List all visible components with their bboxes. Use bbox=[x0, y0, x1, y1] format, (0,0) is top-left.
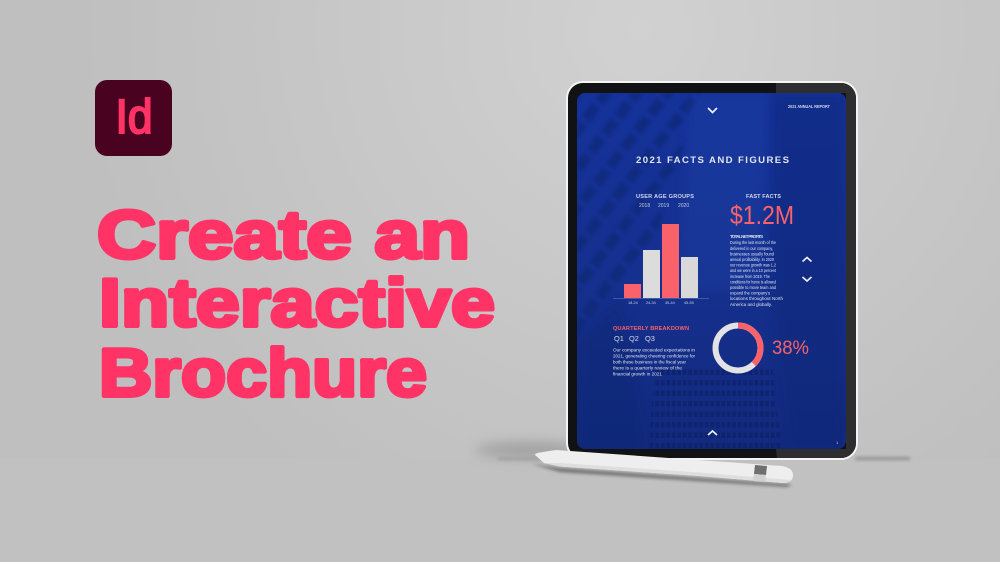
quarterly body: both these business in the fiscal year bbox=[613, 360, 686, 364]
fast facts body: businesses usually found bbox=[730, 251, 774, 256]
quarter tabs: Q1 bbox=[614, 334, 624, 343]
title bbox=[97, 197, 495, 411]
pencil body bbox=[535, 450, 793, 483]
fast facts body: conditions for home is allowed bbox=[730, 279, 776, 284]
building photo texture: facade bbox=[577, 93, 700, 340]
title line: Brochure: Brochure bbox=[99, 335, 427, 411]
age axis labels bbox=[628, 301, 694, 305]
fast facts body: locations throughout North bbox=[730, 296, 783, 301]
donut chart bbox=[716, 326, 760, 370]
quarterly body: financial growth in 2021 bbox=[613, 372, 662, 376]
year tabs: 2018 bbox=[639, 203, 650, 209]
title line: Interactive: Interactive bbox=[99, 265, 495, 341]
fast facts body: America and globally. bbox=[730, 302, 772, 307]
building photo texture: left tower bbox=[582, 309, 632, 404]
fast facts body: and we were in a 10 percent bbox=[730, 268, 777, 273]
quarter tabs: Q2 bbox=[629, 334, 639, 343]
age axis labels: 18-24 bbox=[628, 301, 638, 305]
tablet bezel bbox=[568, 83, 856, 458]
screen heading: 2021 FACTS AND FIGURES bbox=[636, 155, 790, 166]
quarterly body: there is a quarterly review of the bbox=[613, 366, 682, 370]
fast facts body: During the last month of the bbox=[730, 240, 776, 245]
quarter tabs: Q3 bbox=[645, 334, 655, 343]
year tabs: 2020 bbox=[678, 203, 689, 209]
fast facts body: increase from 2019. The bbox=[730, 274, 770, 279]
year tabs: 2019 bbox=[658, 203, 669, 209]
pencil band bbox=[754, 465, 767, 475]
fast facts body bbox=[730, 234, 783, 307]
icon: InDesign logo bbox=[95, 80, 172, 156]
age axis labels: 35-44 bbox=[665, 301, 675, 305]
building photo texture: lower windows bbox=[648, 365, 782, 449]
chart heading: USER AGE GROUPS bbox=[636, 194, 694, 200]
page number: 1 bbox=[836, 440, 839, 445]
fast facts body: delivered in our company, bbox=[730, 246, 773, 251]
pencil shadow bbox=[532, 464, 792, 487]
tablet bbox=[566, 81, 858, 460]
year tabs bbox=[639, 203, 689, 209]
icon: side down chevron bbox=[802, 277, 812, 281]
icon: side up chevron bbox=[802, 258, 812, 262]
tablet rim bbox=[566, 81, 858, 460]
tablet screen bbox=[577, 93, 846, 449]
quarter tabs bbox=[614, 334, 655, 343]
age axis labels: 45-55 bbox=[684, 301, 694, 305]
fast facts heading: FAST FACTS bbox=[746, 194, 781, 200]
fast facts body: annual profitability. In 2020 bbox=[730, 257, 774, 262]
light centre shaft bbox=[693, 102, 695, 104]
quarterly heading: QUARTERLY BREAKDOWN bbox=[613, 326, 689, 332]
panel: fast facts bbox=[730, 194, 794, 307]
big stat: $1.2M bbox=[730, 200, 794, 230]
fast facts body: possible to move team and bbox=[730, 285, 776, 290]
fast facts body: expand the company's bbox=[730, 291, 771, 296]
title line: Create an: Create an bbox=[97, 197, 470, 273]
fast facts body: our revenue growth was 1.2 bbox=[730, 263, 776, 268]
panel: user age groups chart bbox=[613, 194, 709, 305]
quarterly body: Our company exceeded expectations in bbox=[613, 348, 695, 352]
quarterly body bbox=[613, 348, 695, 376]
icon: InDesign logo: Id bbox=[116, 91, 152, 144]
icon: bottom chevron bbox=[708, 431, 717, 435]
age axis labels: 24-34 bbox=[646, 301, 656, 305]
panel: quarterly breakdown bbox=[613, 326, 695, 376]
fast facts body: TOTAL NET PROFITS bbox=[730, 234, 763, 239]
building photo texture: right tower bbox=[772, 93, 846, 344]
icon: top chevron bbox=[708, 108, 717, 112]
bar chart bbox=[613, 224, 709, 298]
tablet shadow bbox=[475, 442, 910, 460]
donut percentage: 38% bbox=[772, 338, 809, 359]
report label: 2021 ANNUAL REPORT bbox=[788, 104, 830, 109]
quarterly body: 2021, generating cheering confidence for bbox=[613, 354, 695, 358]
apple pencil bbox=[532, 450, 793, 487]
